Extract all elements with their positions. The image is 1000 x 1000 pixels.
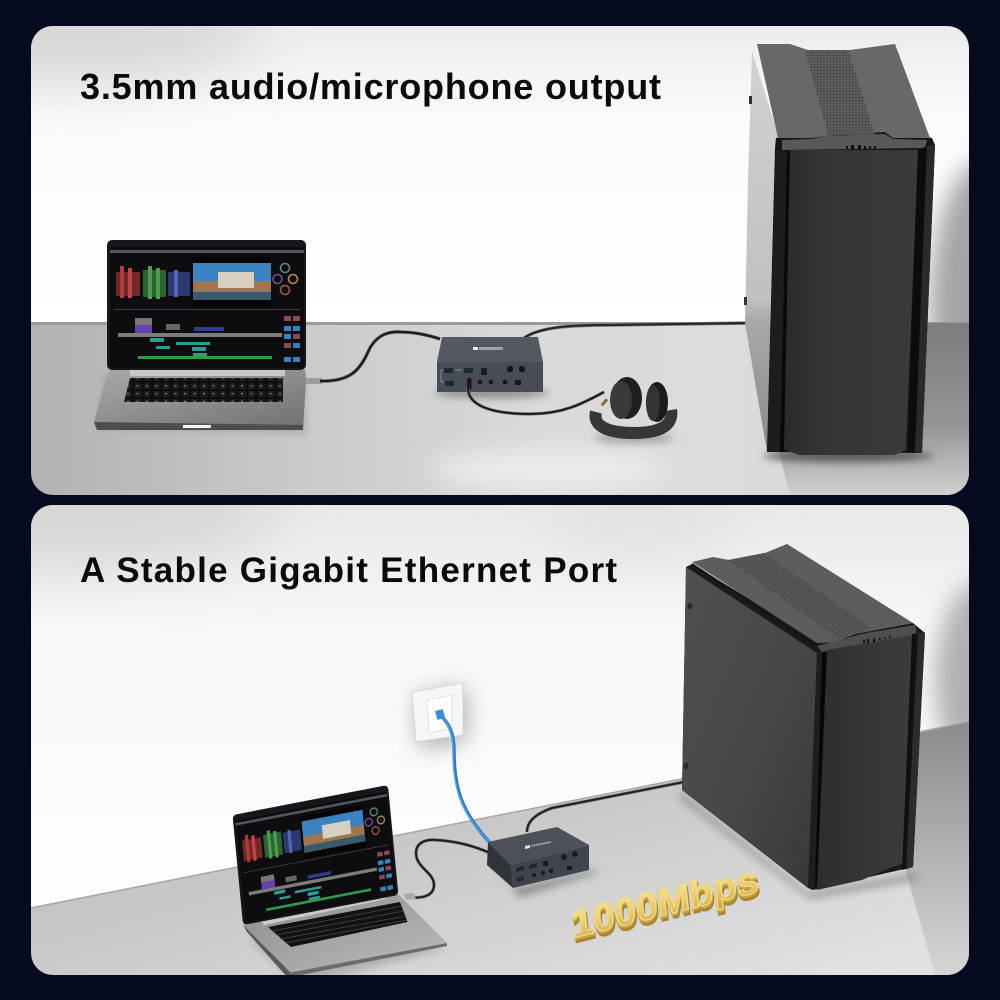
tower PC: panel 2: [680, 544, 925, 900]
laptop: panel 2: [233, 785, 450, 985]
cable: blue ethernet: [435, 709, 490, 843]
title: audio: 3.5mm audio/microphone output: [80, 66, 661, 107]
wall: panel 1: [0, 0, 1000, 460]
wall socket: [412, 683, 466, 748]
gold 1000Mbps letters: 1000Mbps: [569, 858, 760, 947]
tower PC: panel 1: [744, 44, 935, 462]
cable: headphones to dock: [467, 378, 604, 414]
cable: tower to dock, panel 2: [527, 782, 684, 832]
docking station: panel 2: [487, 827, 600, 897]
panel: ethernet: [31, 505, 969, 975]
panel: audio output: [31, 26, 969, 495]
docking station: panel 1: [434, 337, 550, 398]
gold 1000Mbps letters: 1000Mbps: [571, 862, 762, 952]
laptop: panel 1: [94, 240, 306, 434]
cable: laptop to dock, panel 1: [306, 332, 440, 384]
wall: panel 2: [31, 505, 969, 908]
cable: tower to dock, panel 1: [524, 323, 750, 338]
gold 1000Mbps letters: 1000Mbps: [570, 860, 760, 949]
headphones: [594, 377, 674, 443]
table: panel 2: [31, 722, 969, 975]
title: ethernet: A Stable Gigabit Ethernet Port: [80, 551, 617, 590]
cable: laptop to dock, panel 2: [408, 840, 490, 898]
table: panel 1: [31, 322, 969, 495]
